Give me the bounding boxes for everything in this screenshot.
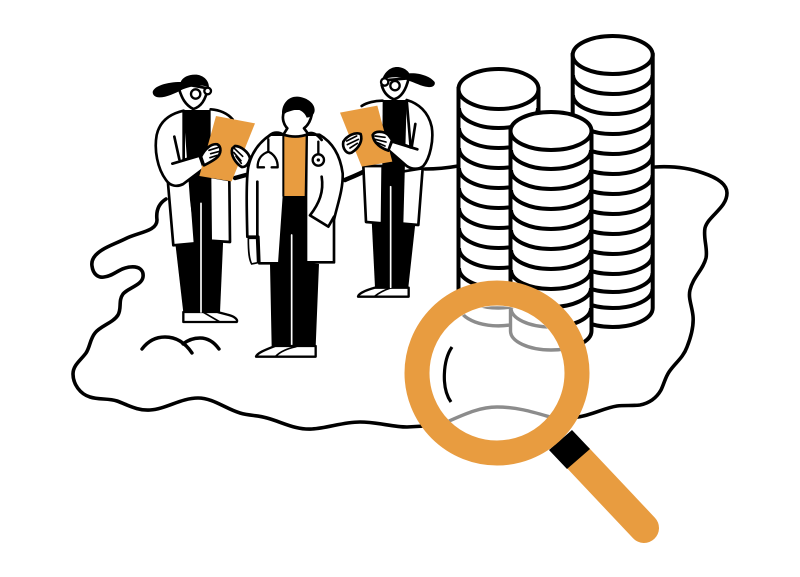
icon: hill mark	[142, 337, 219, 353]
orange shirt	[284, 135, 307, 196]
map outline blob	[73, 166, 727, 429]
lens contents	[448, 306, 561, 422]
coat upper	[388, 100, 432, 169]
lower coat	[363, 166, 423, 225]
lower coat	[168, 177, 230, 245]
doctor: right woman	[340, 67, 435, 297]
shirt	[183, 110, 212, 242]
coat pocket line	[310, 177, 334, 227]
handle collar	[549, 430, 590, 469]
face	[382, 78, 409, 99]
glasses	[381, 78, 400, 90]
ponytail and hair	[153, 75, 209, 97]
doctor: left woman	[153, 75, 255, 322]
clipboard	[340, 106, 392, 167]
shoes	[256, 346, 316, 357]
trouser crease	[388, 187, 393, 287]
face	[179, 84, 208, 109]
shirt	[382, 100, 407, 224]
hair	[282, 97, 315, 118]
clipboard	[199, 116, 255, 181]
pants	[175, 237, 223, 313]
hands	[201, 144, 250, 167]
magnifying glass	[417, 288, 644, 528]
coin stack: right	[573, 36, 653, 327]
glasses	[191, 88, 211, 99]
hands	[343, 132, 392, 153]
ring	[417, 293, 577, 453]
hair and ponytail	[382, 67, 435, 87]
shoes	[183, 312, 237, 322]
coat upper and sleeve	[156, 111, 204, 186]
coin stack: middle	[510, 112, 592, 350]
handle	[578, 458, 644, 528]
shoes	[358, 288, 409, 297]
pants	[372, 220, 415, 287]
trousers	[270, 195, 319, 347]
doctor: centre man	[247, 97, 343, 357]
illustration	[71, 34, 729, 543]
trouser crease	[198, 203, 203, 312]
lens glint	[444, 347, 452, 402]
hand	[248, 238, 258, 264]
coin stack: left	[458, 69, 538, 326]
neck and face	[283, 107, 312, 137]
stethoscope	[258, 139, 278, 167]
lens	[418, 294, 576, 452]
collar	[268, 133, 322, 140]
lab coat	[247, 135, 343, 263]
